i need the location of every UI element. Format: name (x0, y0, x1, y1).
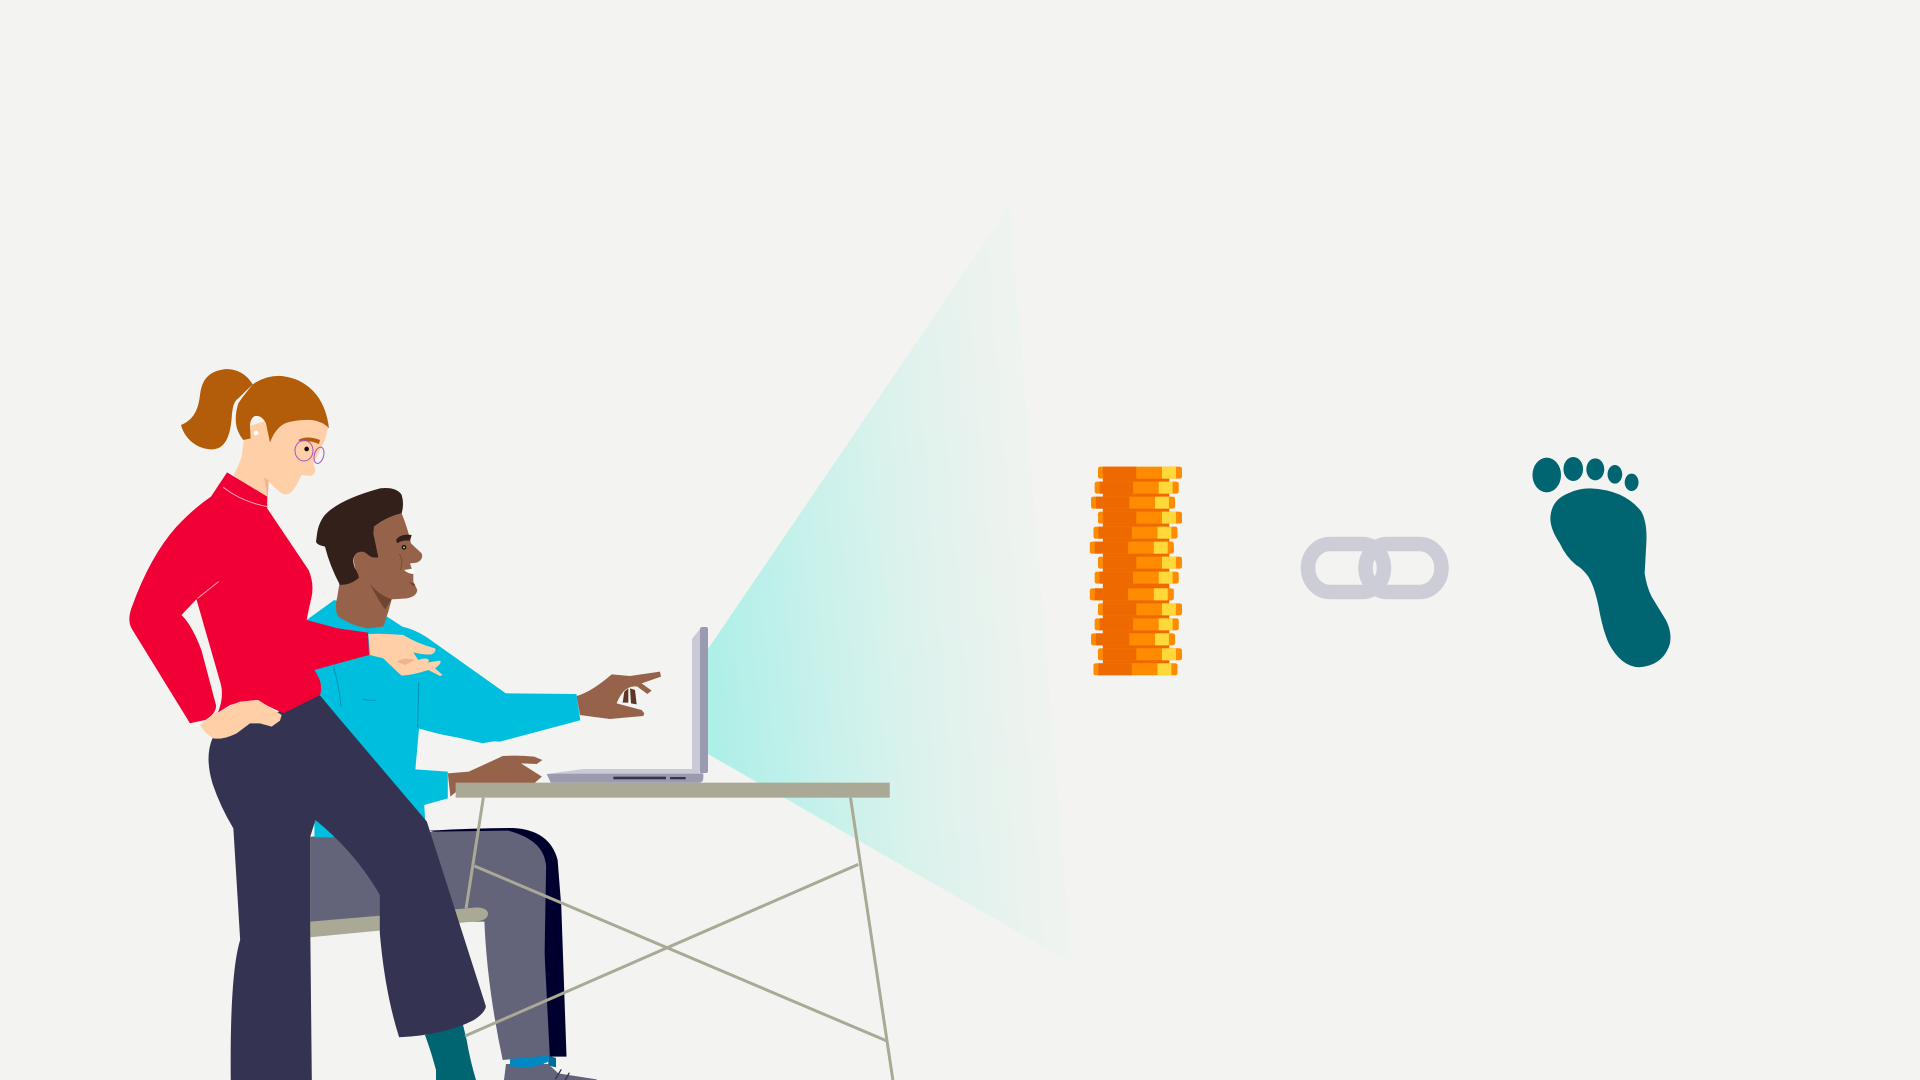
table (456, 783, 893, 1080)
pointing hand (577, 672, 661, 719)
table top (456, 783, 890, 798)
sweater lines (198, 487, 267, 598)
shirt seam lines (333, 667, 419, 728)
light beam from laptop (708, 205, 1072, 963)
laptop base (547, 769, 703, 783)
feet and socks (425, 1023, 597, 1080)
man seated: upper body (307, 600, 580, 743)
lower shirt (314, 720, 581, 837)
icon: chain link (1308, 544, 1442, 592)
eye (402, 545, 406, 550)
woman standing: trousers (209, 695, 486, 1080)
ponytail (181, 369, 253, 449)
glasses (295, 440, 326, 465)
dark sock (548, 1056, 556, 1067)
back trouser shadow (429, 828, 567, 1057)
laces (555, 1069, 569, 1080)
hair (316, 488, 403, 585)
chin shade (408, 582, 415, 587)
neck (336, 563, 393, 628)
shirt and pointing arm (307, 600, 580, 743)
neck shadow (370, 583, 392, 609)
neck shadow (264, 477, 269, 500)
man head (316, 488, 422, 628)
table legs and cross bars (465, 798, 893, 1080)
forward hand (368, 634, 443, 676)
neck and face (233, 410, 328, 502)
hair (236, 376, 329, 443)
shoe (504, 1064, 597, 1080)
far leg (425, 1023, 476, 1080)
eyebrow (396, 535, 412, 543)
face (354, 513, 422, 599)
smile (404, 568, 414, 574)
laptop (547, 627, 708, 783)
woman head (181, 369, 329, 502)
trousers (310, 831, 550, 1060)
eyebrow (298, 437, 320, 444)
icon: coin stack (1090, 467, 1182, 675)
icon: footprint (1532, 457, 1670, 667)
hand on table (448, 756, 542, 797)
hand on hip (200, 700, 282, 739)
earring (254, 431, 258, 435)
eye (304, 447, 309, 451)
palm shade (397, 659, 415, 665)
laptop screen (700, 627, 708, 773)
chair seat (310, 907, 488, 937)
man seated: legs (310, 720, 581, 1060)
curled fingers (623, 688, 637, 704)
woman standing: sweater (129, 472, 369, 723)
cheek line (399, 554, 402, 570)
blue sock (510, 1056, 548, 1067)
